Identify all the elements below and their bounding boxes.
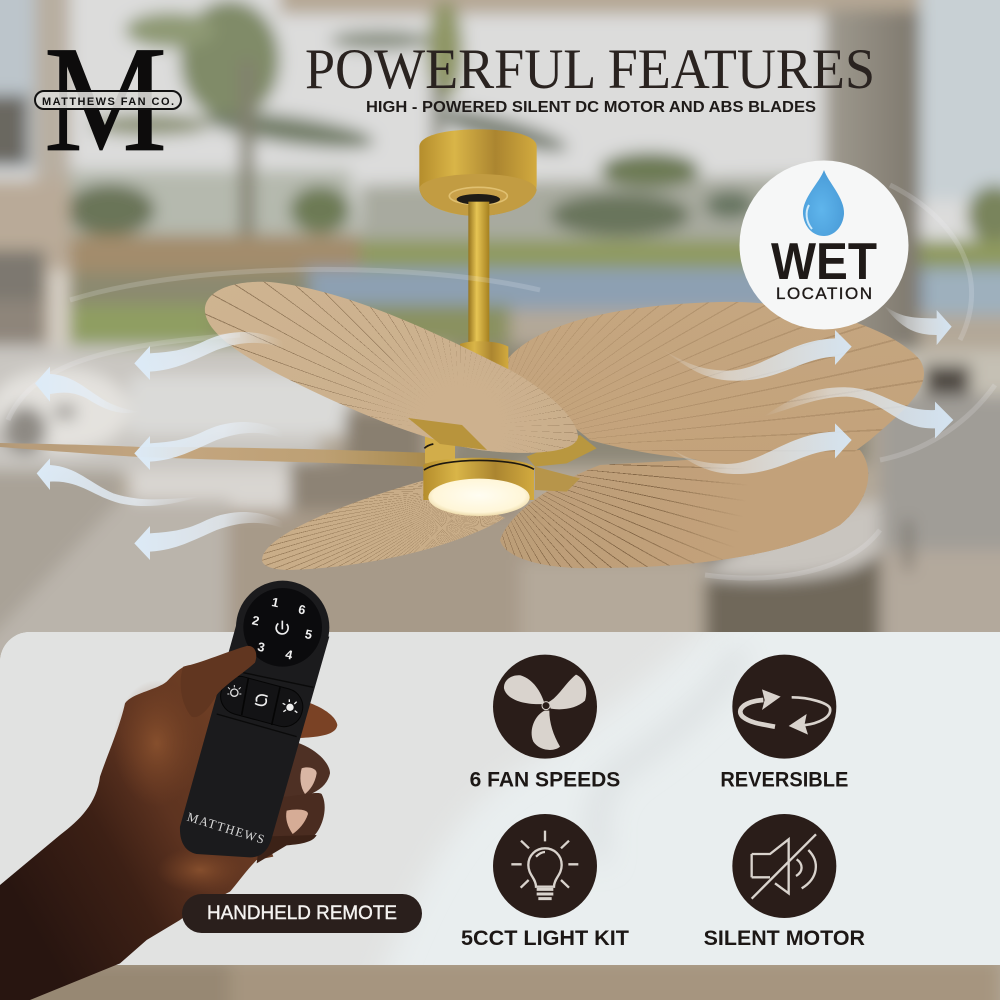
fan blade: lower right [500, 450, 868, 568]
fan blade: edge-on left [0, 443, 428, 467]
hand holding remote [0, 581, 337, 1000]
small blade bracket [408, 418, 487, 450]
logo: Matthews Fan Co.: MATTHEWS FAN CO. [42, 96, 174, 108]
badge: wet location: LOCATION [776, 284, 872, 303]
remote buttons: 5 [304, 627, 313, 642]
remote control: MATTHEWS [185, 810, 266, 847]
remote buttons: 4 [284, 647, 294, 663]
hand [0, 665, 273, 1000]
motor housing [423, 435, 597, 500]
title: POWERFUL FEATURES [305, 38, 875, 101]
remote buttons [251, 595, 313, 663]
icon: reversible arrows [732, 655, 836, 759]
bottom panel [0, 632, 1000, 965]
thumb [181, 646, 256, 717]
arrows: right side [660, 305, 953, 474]
icon: light bulb [493, 814, 597, 918]
logo: Matthews Fan Co.: M [44, 15, 167, 183]
icon: muted speaker [732, 814, 836, 918]
label: handheld remote [182, 894, 422, 933]
fan blade: upper left [200, 278, 582, 458]
feature icons [461, 655, 865, 950]
feature labels: REVERSIBLE [720, 768, 848, 792]
feature labels [461, 768, 865, 950]
feature labels: SILENT MOTOR [704, 926, 865, 950]
label: handheld remote: HANDHELD REMOTE [207, 903, 397, 924]
feature labels: 6 FAN SPEEDS [470, 768, 620, 792]
badge: wet location: WET [771, 233, 877, 291]
downrod [468, 202, 489, 343]
subtitle: HIGH - POWERED SILENT DC MOTOR AND ABS BLADES [366, 99, 816, 116]
ceiling canopy [419, 129, 537, 216]
coupler [460, 341, 508, 373]
fingers [257, 697, 337, 863]
fan blade: lower left [262, 480, 505, 570]
faint air rings [8, 185, 995, 578]
feature labels: 5CCT LIGHT KIT [461, 926, 629, 950]
remote buttons: 3 [256, 640, 266, 655]
arrows: left side [35, 332, 283, 560]
remote buttons: 6 [297, 602, 307, 618]
badge: wet location [740, 160, 908, 330]
icon: fan [493, 655, 597, 759]
remote control [180, 581, 329, 857]
remote buttons: 2 [251, 613, 260, 629]
icon: water drop [803, 170, 844, 236]
fan blade: upper right [508, 302, 924, 460]
remote buttons: 1 [270, 595, 280, 610]
LED light [428, 479, 530, 516]
